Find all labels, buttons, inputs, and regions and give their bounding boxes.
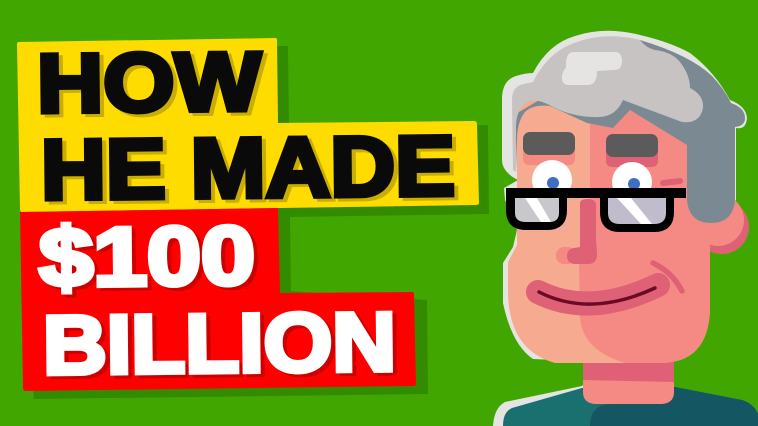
eyebrows [523, 132, 575, 155]
heading: BILLION: BILLION [43, 295, 396, 392]
character outline [493, 31, 747, 426]
ear [695, 200, 749, 254]
neck [583, 355, 674, 404]
heading: BILLION: BILLION [47, 298, 400, 395]
face [508, 100, 710, 363]
panel shadows [23, 46, 489, 399]
eye: right [612, 162, 652, 202]
hair highlight [562, 52, 622, 85]
heading: HE MADE: HE MADE [45, 122, 460, 221]
heading: $100: $100 [43, 212, 260, 307]
nose [556, 199, 597, 264]
mouth [538, 285, 658, 304]
hair back [514, 40, 745, 223]
eyebrow shadows [523, 145, 575, 165]
heading: HE MADE: HE MADE [40, 119, 455, 218]
panel: yellow headline [17, 35, 479, 212]
smile line [653, 263, 682, 291]
heading: $100: $100 [39, 209, 255, 304]
cheek mark [663, 181, 680, 183]
glasses [506, 188, 686, 232]
hair top [512, 36, 703, 172]
heading: HOW: HOW [37, 35, 262, 130]
heading: HOW: HOW [41, 38, 266, 133]
eye: left [532, 160, 572, 200]
shirt [503, 387, 758, 426]
panel: red headline [20, 208, 416, 391]
character: man with glasses [493, 31, 758, 426]
